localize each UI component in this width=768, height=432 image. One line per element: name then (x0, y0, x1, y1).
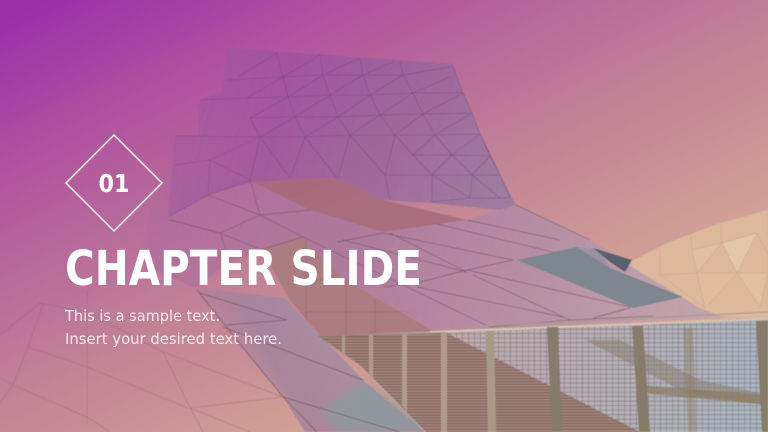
lower facade wall (262, 237, 442, 336)
diamond badge with chapter number (66, 135, 162, 231)
lower deck / roof (140, 137, 725, 336)
dark teal roof panel (517, 247, 683, 308)
subtitle text: This is a sample text. (64, 307, 220, 325)
triangular facade grid (175, 53, 510, 202)
fence posts (342, 321, 768, 432)
fence rail (318, 312, 768, 336)
chapter number: 01 (98, 169, 130, 198)
upper building tiers (168, 48, 516, 217)
dome on the right (628, 210, 768, 322)
title: CHAPTER SLIDE (65, 241, 422, 297)
lower-left surface lines (0, 290, 283, 432)
walkway fence (318, 312, 768, 432)
subtitle text: Insert your desired text here. (65, 330, 282, 348)
subtitle text (64, 307, 282, 348)
red reflective panel (253, 178, 467, 232)
foreground sail panels (195, 288, 425, 432)
diamond outline (66, 135, 162, 231)
small roof vent (593, 248, 632, 272)
